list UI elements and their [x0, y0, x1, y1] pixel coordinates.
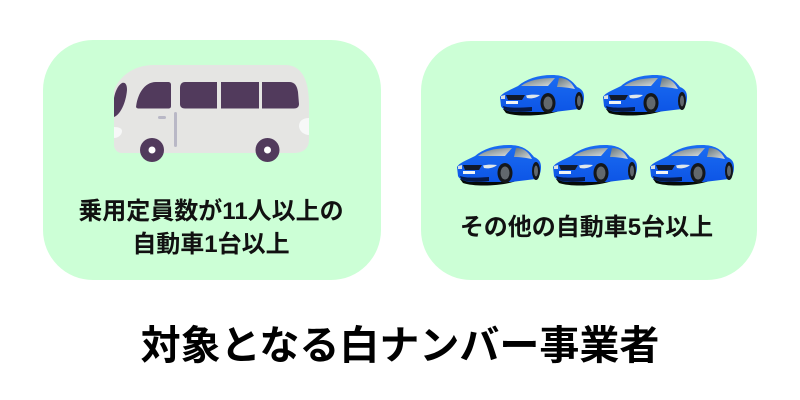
icon: blue car top left [500, 75, 584, 116]
icon: blue car bottom center [553, 145, 637, 186]
icon: blue car bottom left [457, 145, 541, 186]
icon: bus [114, 65, 309, 162]
text: left panel caption: 乗用定員数が11人以上の [78, 198, 344, 225]
icon: blue car top right [603, 75, 687, 116]
title: 対象となる白ナンバー事業者 [141, 324, 659, 368]
panel: right background [421, 41, 757, 280]
icon: blue car bottom right [650, 145, 734, 186]
text: left panel caption [78, 198, 344, 258]
panel: left background [43, 40, 381, 280]
text: right panel caption: その他の自動車5台以上 [460, 214, 713, 241]
text: left panel caption: 自動車1台以上 [132, 231, 290, 258]
